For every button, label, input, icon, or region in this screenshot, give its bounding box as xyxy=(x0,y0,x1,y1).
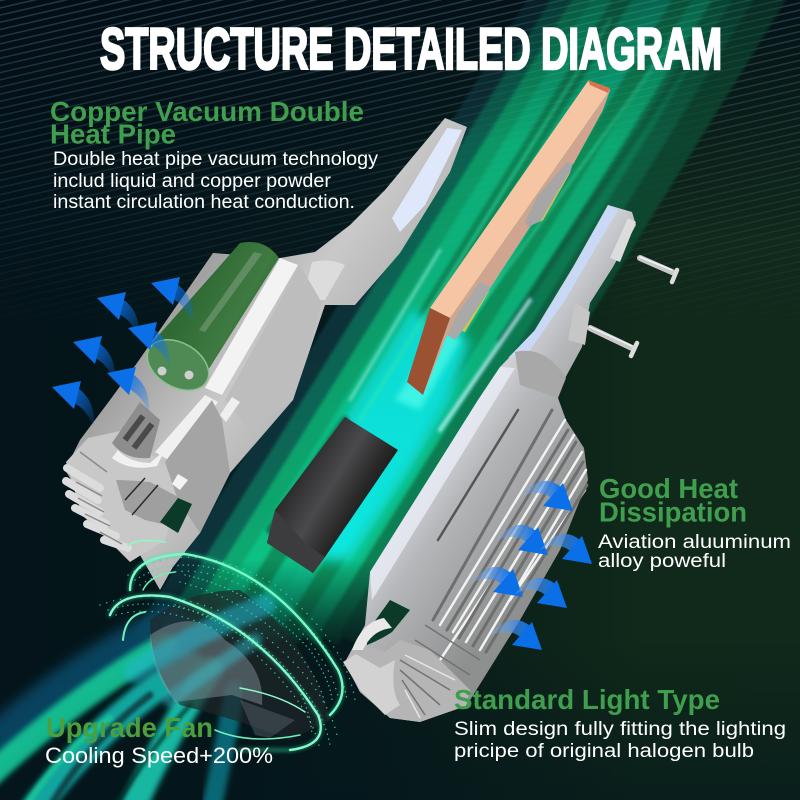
callout: copper vacuum double heat pipe: Copper Vacuum Double xyxy=(50,96,364,127)
cyan light through fan xyxy=(135,605,265,700)
arrow xyxy=(521,481,573,511)
blue-lit edge xyxy=(392,128,462,232)
fin cluster xyxy=(66,430,178,562)
swirl rings xyxy=(110,541,342,750)
right half housing xyxy=(343,205,636,722)
callout: copper vacuum double heat pipe: Double heat pipe vacuum technology xyxy=(53,149,379,170)
shaded wedge xyxy=(165,400,230,533)
callout: standard light type: Standard Light Type xyxy=(454,684,720,715)
arrow xyxy=(496,525,548,555)
arrow xyxy=(107,367,149,413)
black rubber block xyxy=(267,417,398,573)
callout: upgrade fan xyxy=(45,712,273,768)
left half housing xyxy=(65,118,467,590)
callout: upgrade fan: Upgrade Fan xyxy=(46,712,213,743)
callout: good heat dissipation xyxy=(598,473,791,572)
LED module lower xyxy=(447,282,491,340)
hub ring and openings xyxy=(112,450,165,468)
arrow xyxy=(128,322,170,368)
callout: good heat dissipation: Good Heat xyxy=(599,473,738,504)
copper plate xyxy=(407,80,610,395)
arrow xyxy=(97,292,139,338)
callout: standard light type: Slim design fully fitting the lighting xyxy=(454,719,786,740)
white stripes xyxy=(205,258,298,395)
housing body xyxy=(65,118,467,590)
blue-lit strip xyxy=(508,205,618,358)
end face xyxy=(345,640,470,722)
callout: copper vacuum double heat pipe: includ liquid and copper powder xyxy=(53,171,332,192)
callout: standard light type xyxy=(454,684,786,762)
callout: copper vacuum double heat pipe xyxy=(50,96,379,213)
arrow xyxy=(471,567,523,597)
arrow xyxy=(540,534,592,564)
callout: good heat dissipation: Aviation aluuminum xyxy=(598,532,791,553)
light beams behind the exploded bulb xyxy=(143,0,776,640)
body and fins xyxy=(345,205,636,722)
arrow xyxy=(52,381,94,427)
fan blades xyxy=(150,590,330,740)
callout: copper vacuum double heat pipe: instant circulation heat conduction. xyxy=(53,192,355,213)
screws xyxy=(590,257,677,356)
blue airflow arrows, right xyxy=(471,481,592,650)
fan with swirl rings xyxy=(100,541,355,750)
arrow xyxy=(515,578,567,608)
fan airflow streams xyxy=(0,625,235,800)
arrow xyxy=(73,336,115,382)
LED module upper xyxy=(525,162,573,227)
blue airflow arrows, left xyxy=(52,277,193,427)
callout: good heat dissipation: Dissipation xyxy=(599,496,747,528)
callout: good heat dissipation: alloy poweful xyxy=(598,551,726,572)
callout: upgrade fan: Cooling Speed+200% xyxy=(45,743,273,768)
callout: copper vacuum double heat pipe: Heat Pipe xyxy=(50,118,176,150)
arrow xyxy=(490,620,542,650)
callout: standard light type: pricipe of original halogen bulb xyxy=(454,741,754,762)
arrow xyxy=(151,277,193,323)
green heat pipe cylinder xyxy=(138,242,279,401)
speckles xyxy=(100,557,355,750)
long fin lines xyxy=(433,410,587,660)
